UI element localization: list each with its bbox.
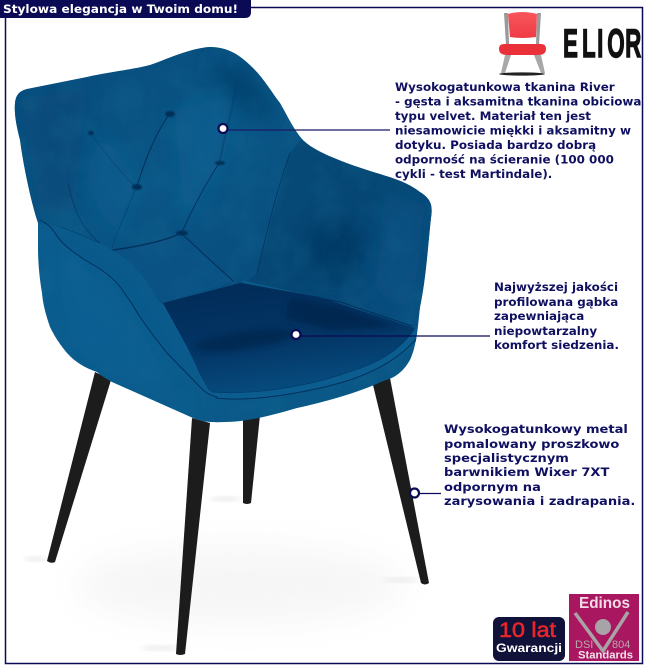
text: metal legs: odpornym na (444, 480, 541, 494)
text: foam: zapewniająca (494, 309, 584, 323)
marker: metal legs (410, 488, 419, 498)
marker: fabric (218, 124, 228, 133)
badge: Edinos standards: Edinos (579, 595, 630, 612)
chair upholstery (14, 47, 432, 422)
text: foam: Najwyższej jakości (494, 280, 618, 294)
logo: chair icon (499, 12, 546, 76)
leg: front right (373, 378, 429, 584)
text: fabric: - gęsta i aksamitna tkanina obiciowa (395, 94, 641, 108)
text: metal legs: barwnikiem Wixer 7XT (444, 465, 610, 479)
badge: Edinos standards: 804 (612, 639, 630, 651)
tufted backrest (15, 47, 302, 305)
badge: 10 year warranty (493, 617, 565, 661)
text: metal legs: specjalistycznym (444, 451, 569, 465)
marker: foam (292, 330, 300, 339)
seat front rim (209, 332, 417, 392)
leg: back (243, 415, 260, 504)
leader line: metal legs (419, 492, 441, 494)
header bar (0, 0, 251, 18)
text: foam: komfort siedzenia. (494, 338, 619, 352)
seat cushion (163, 283, 414, 393)
right arm inner (245, 139, 432, 330)
left arm band (41, 223, 159, 301)
shell sheen (97, 372, 174, 410)
callout: fabric (218, 80, 646, 181)
leg: front left (47, 372, 111, 563)
velvet mottling (40, 164, 423, 415)
text: foam: niepowtarzalny (494, 324, 597, 338)
badge: Edinos standards (569, 594, 639, 662)
text: metal legs: pomalowany proszkowo (444, 437, 620, 451)
badge: 10 year warranty: 10 lat (499, 619, 556, 642)
text: fabric: odporność na ścieranie (100 000 (395, 152, 614, 166)
lower back panel (113, 235, 233, 303)
badge: Edinos standards: DSI (575, 639, 593, 651)
text: metal legs: Wysokogatunkowy metal (444, 422, 628, 436)
text: fabric: niesamowicie miękki i aksamitny w (395, 124, 631, 138)
logo: ELIOR wordmark: ELIOR (563, 21, 641, 66)
leader line: foam (301, 335, 490, 337)
text: foam: profilowana gąbka (494, 295, 618, 309)
header text: Stylowa elegancja w Twoim domu! (3, 2, 238, 16)
text: metal legs: zarysowania i zadrapania. (444, 494, 635, 508)
floor shadow (24, 497, 418, 650)
piping and seams (40, 80, 417, 399)
badge: 10 year warranty: Gwarancji (496, 641, 562, 655)
leader line: fabric (228, 129, 390, 131)
outer shell (14, 47, 432, 422)
text: fabric: dotyku. Posiada bardzo dobrą (395, 138, 596, 152)
leg: front centre (176, 418, 210, 655)
badge: Edinos standards: Standards (578, 650, 633, 662)
callout: foam (292, 280, 622, 352)
text: fabric: typu velvet. Materiał ten jest (395, 109, 591, 123)
tuft buttons (88, 111, 225, 236)
text: fabric: Wysokogatunkowa tkanina River (395, 80, 615, 94)
chair legs (47, 372, 429, 655)
text: fabric: cykli - test Martindale). (395, 167, 552, 181)
callout: metal legs (410, 422, 635, 508)
